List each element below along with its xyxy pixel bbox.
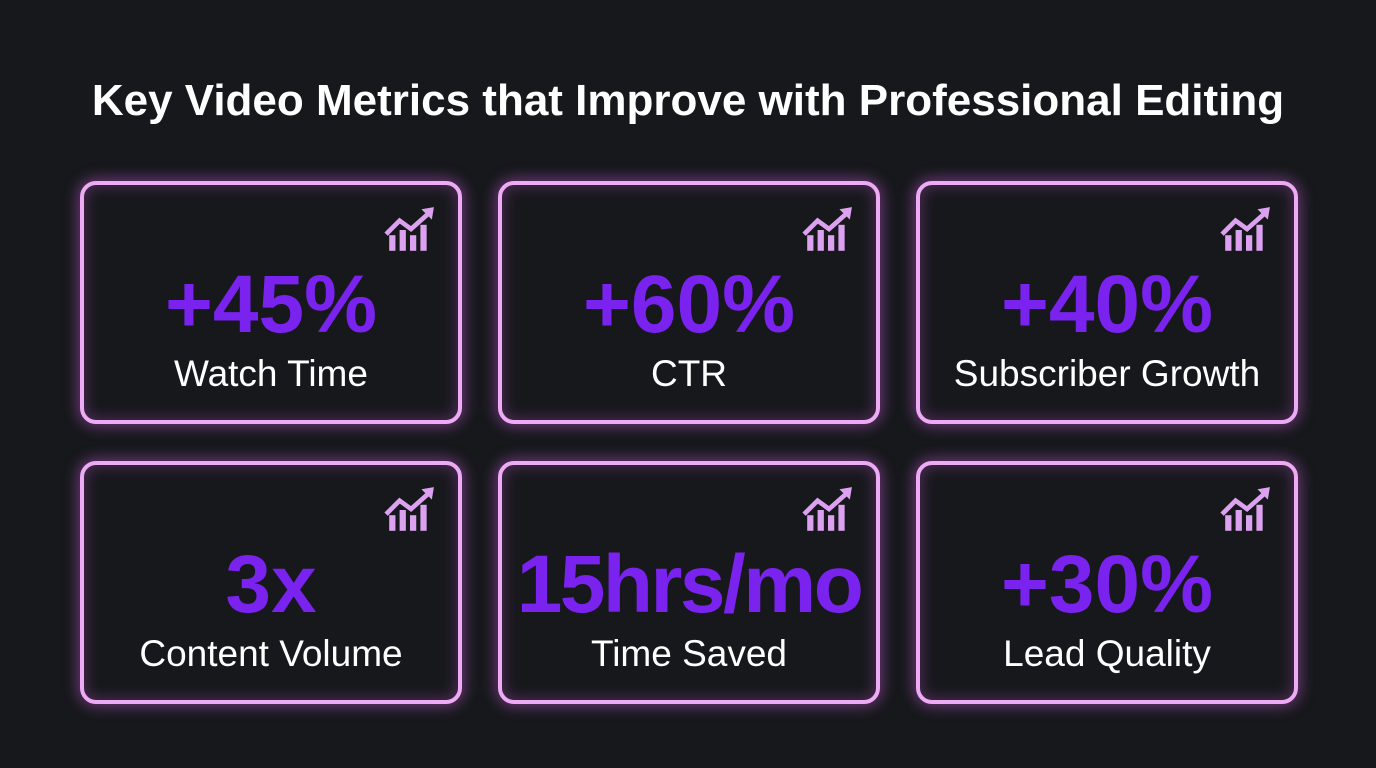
value: +30% [1001, 539, 1213, 630]
title: Key Video Metrics that Improve with Professional Editing [92, 76, 1284, 125]
value: +60% [583, 259, 795, 350]
card: watch time [80, 181, 462, 424]
icon: growth chart [802, 207, 852, 251]
label: Lead Quality [1003, 633, 1211, 674]
label: Time Saved [591, 633, 787, 674]
value: +45% [165, 259, 377, 350]
label: Subscriber Growth [954, 353, 1260, 394]
icon: growth chart [384, 487, 434, 531]
card: time saved [498, 461, 880, 704]
card: subscriber growth [916, 181, 1298, 424]
icon: growth chart [1220, 487, 1270, 531]
label: Watch Time [174, 353, 368, 394]
icon: growth chart [1220, 207, 1270, 251]
value: 15hrs/mo [517, 539, 861, 630]
label: Content Volume [139, 633, 403, 674]
value: 3x [225, 539, 317, 630]
value: +40% [1001, 259, 1213, 350]
icon: growth chart [384, 207, 434, 251]
label: CTR [651, 353, 727, 394]
card: ctr [498, 181, 880, 424]
card: content volume [80, 461, 462, 704]
card: lead quality [916, 461, 1298, 704]
icon: growth chart [802, 487, 852, 531]
